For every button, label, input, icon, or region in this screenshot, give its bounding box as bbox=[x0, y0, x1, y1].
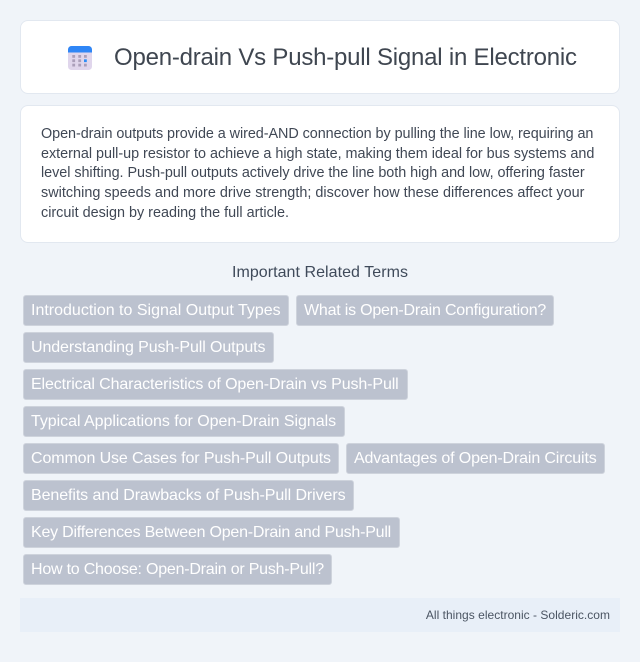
tag bbox=[23, 406, 345, 437]
description text: Open-drain outputs provide a wired-AND connection by pulling the line low, requiring an bbox=[41, 126, 593, 142]
tag bbox=[23, 295, 289, 326]
tag bbox=[23, 517, 400, 548]
tag bbox=[23, 480, 354, 511]
tag: Common Use Cases for Push-Pull Outputs bbox=[31, 450, 331, 467]
tag list bbox=[23, 295, 605, 585]
tag bbox=[23, 554, 332, 585]
description text: switching speeds and more drive strength; discover how these differences affect your bbox=[41, 185, 584, 201]
tag: Advantages of Open-Drain Circuits bbox=[354, 450, 597, 467]
tag: Key Differences Between Open-Drain and Push-Pull bbox=[31, 524, 391, 541]
heading: related terms: Important Related Terms bbox=[232, 264, 408, 281]
tag bbox=[296, 295, 554, 326]
title: Open-drain Vs Push-pull Signal in Electronic bbox=[114, 44, 577, 71]
panel: description bbox=[20, 105, 620, 243]
tag: Electrical Characteristics of Open-Drain vs Push-Pull bbox=[31, 376, 399, 393]
description text bbox=[41, 126, 594, 221]
tag: Understanding Push-Pull Outputs bbox=[31, 339, 265, 356]
tag: Benefits and Drawbacks of Push-Pull Drivers bbox=[31, 487, 345, 504]
description text: external pull-up resistor to achieve a high state, making them ideal for bus systems and bbox=[41, 146, 594, 162]
tag bbox=[346, 443, 605, 474]
tag bbox=[23, 369, 408, 400]
panel: header bbox=[20, 20, 620, 94]
tag: Introduction to Signal Output Types bbox=[31, 302, 281, 319]
tag bbox=[23, 443, 339, 474]
tag: How to Choose: Open-Drain or Push-Pull? bbox=[31, 561, 324, 578]
tag bbox=[23, 332, 274, 363]
footer credit: All things electronic - Solderic.com bbox=[426, 608, 610, 622]
icon: calendar bbox=[68, 46, 92, 70]
tag: What is Open-Drain Configuration? bbox=[304, 302, 546, 319]
description text: circuit design by reading the full article. bbox=[41, 205, 289, 221]
footer bbox=[20, 598, 620, 632]
description text: level shifting. Push-pull outputs actively drive the line both high and low, offering faster bbox=[41, 165, 585, 181]
tag: Typical Applications for Open-Drain Signals bbox=[31, 413, 336, 430]
